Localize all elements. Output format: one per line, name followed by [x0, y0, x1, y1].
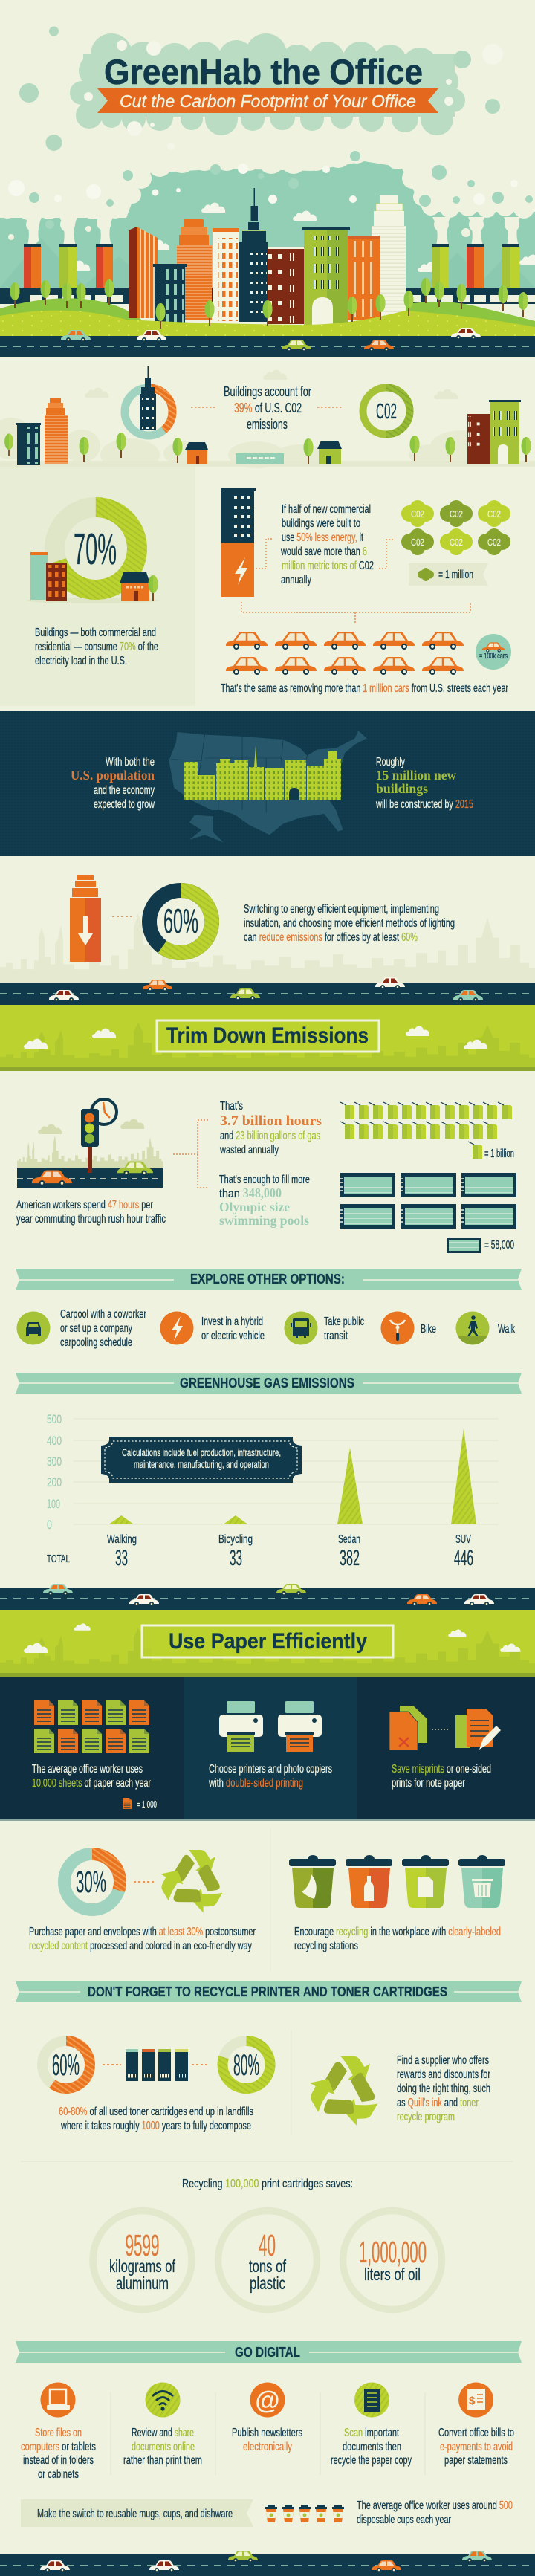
text: 3.7 billion hours	[219, 1100, 322, 1156]
small buildings and house	[30, 552, 158, 601]
recycle icon	[303, 2056, 387, 2129]
text: population growth: With both the	[106, 756, 155, 768]
legend: 1 billion: = 1 billion	[484, 1148, 514, 1160]
text: buildings consume 70%: residential — consume 70% of the	[35, 641, 158, 653]
text: swimming pools: than 348,000	[219, 1185, 282, 1200]
building: dark red	[268, 247, 304, 324]
intro text: Recycling 100,000 print cartridges saves:	[182, 2178, 353, 2190]
stat: plastic: 40	[259, 2228, 276, 2262]
green skyline	[0, 1023, 535, 1067]
text: 10,000 sheets: The average office worker uses	[32, 1763, 143, 1776]
text: scan	[331, 2427, 412, 2467]
callout	[101, 1437, 302, 1483]
orange tower with arrow	[70, 875, 101, 962]
sheets of paper grid	[34, 1700, 149, 1753]
right buildings	[467, 400, 521, 464]
CO2 cloud grid: C02	[450, 537, 463, 548]
legend: 100k cars	[476, 634, 511, 670]
legend: 58,000: = 58,000	[484, 1239, 514, 1252]
text: switching	[244, 903, 455, 944]
CO2 donut: C02	[376, 400, 397, 424]
text: buildings consume 70%	[35, 627, 158, 667]
banner: explore other options: EXPLORE OTHER OPTIONS:	[190, 1272, 345, 1287]
text: 3.7 billion hours: and 23 billion gallons of gas	[220, 1130, 320, 1142]
totals: 33	[115, 1546, 128, 1570]
category labels: Walking	[107, 1533, 137, 1546]
text: 47 hours: year commuting through rush hour traffic	[16, 1213, 166, 1226]
elevated bridge	[0, 288, 535, 304]
text: recycled content: Purchase paper and envelopes with at least 30% postconsumer	[29, 1926, 256, 1938]
panel: commuting traffic	[16, 1099, 516, 1253]
panel: half of new commercial buildings	[221, 488, 511, 695]
text: store files	[21, 2427, 96, 2481]
text: swimming pools: Olympic size	[219, 1200, 290, 1214]
dotted connector	[173, 1120, 208, 1188]
icon: bolt	[160, 1311, 193, 1345]
icon: bill: $	[469, 2395, 476, 2407]
panel: recycling saves	[21, 2161, 513, 2310]
option: transit text: Take public	[324, 1315, 364, 1328]
y axis labels: 300	[47, 1454, 62, 1469]
text: 15 million new buildings	[375, 756, 473, 811]
text: buildings account	[224, 384, 311, 432]
section: buildings account for 39%	[0, 366, 535, 471]
category labels: Bicycling	[218, 1533, 253, 1546]
text: 50% less energy: use 50% less energy, it	[282, 531, 363, 544]
y axis labels: 0	[47, 1518, 52, 1532]
legend: 1,000	[123, 1798, 157, 1810]
text: 50% less energy: would save more than 6	[280, 546, 367, 558]
text: store files: computers or tablets	[21, 2441, 96, 2453]
text: switching: Switching to energy efficient equipment, implementing	[244, 903, 439, 916]
text: scan: documents then	[343, 2441, 401, 2453]
y axis labels: 100	[47, 1497, 60, 1511]
text: find a supplier: rewards and discounts for	[397, 2068, 490, 2081]
text: 10,000 sheets: 10,000 sheets of paper each year	[32, 1777, 151, 1790]
option: carpool text: carpooling schedule	[60, 1336, 132, 1349]
donut 60%: 60%	[163, 902, 198, 940]
traffic light and clock	[81, 1099, 117, 1173]
icon: at sign	[250, 2383, 285, 2417]
icon: bike	[380, 1311, 415, 1345]
text: recycling stations: Encourage recycling in the workplace with clearly-labeled	[294, 1926, 501, 1938]
text: recycling stations	[294, 1926, 501, 1952]
CO2 cloud grid: C02	[487, 537, 501, 548]
polluted sky	[0, 161, 535, 297]
legend: 1 million: = 1 million	[438, 569, 473, 581]
text: 15 million new buildings: will be constructed by 2015	[375, 798, 473, 811]
road with cars	[0, 977, 535, 1005]
text: 50% less energy: annually	[281, 574, 311, 586]
building: cream	[213, 228, 239, 324]
text: misprints	[392, 1763, 491, 1790]
y axis labels	[47, 1412, 62, 1532]
text: misprints: Save misprints or one-sided	[392, 1763, 491, 1776]
banner: greenhouse gas emissions	[16, 1373, 522, 1394]
banner: explore other options	[16, 1269, 522, 1290]
donut 70%: 70%	[74, 525, 117, 574]
smog cloud behind title	[70, 33, 465, 135]
text: buildings account: Buildings account for	[224, 384, 311, 399]
icon: wifi	[146, 2383, 180, 2417]
heading: Trim Down Emissions	[166, 1023, 369, 1048]
text: 15 million new buildings: buildings	[376, 781, 428, 796]
panel: US map dark band	[0, 711, 535, 856]
building: navy spire	[239, 188, 268, 322]
legend: 1 billion	[468, 1142, 514, 1160]
text: 10,000 sheets	[32, 1763, 151, 1790]
text: landfills: 60-80% of all used toner cartridges end up in landfills	[59, 2106, 253, 2118]
text: newsletters	[232, 2427, 302, 2453]
option: hybrid text: Invest in a hybrid	[201, 1315, 263, 1328]
donut 80%: 80%	[233, 2049, 259, 2082]
text: 3.7 billion hours: That's	[220, 1100, 243, 1113]
recycling bins	[289, 1855, 505, 1908]
text: newsletters: Publish newsletters	[232, 2427, 302, 2439]
icon: at sign: @	[255, 2386, 280, 2415]
option: transit text: transit	[324, 1330, 348, 1342]
banner: toner cartridges: DON'T FORGET TO RECYCLE PRINTER AND TONER CARTRIDGES	[88, 1984, 447, 1999]
panel: reusable mugs	[21, 2499, 513, 2527]
text: population growth: and the economy	[94, 784, 155, 797]
text: store files: Store files on	[35, 2427, 82, 2439]
legend: 58,000	[447, 1238, 514, 1253]
text: e-payments: paper statements	[444, 2454, 508, 2467]
text: swimming pools	[219, 1174, 310, 1228]
car rows	[226, 632, 464, 675]
dotted connectors	[241, 539, 470, 623]
stat: aluminum: kilograms of	[109, 2256, 175, 2276]
back hills	[0, 298, 535, 336]
text: landfills	[59, 2106, 253, 2132]
ribbon banner	[97, 88, 438, 113]
stat: plastic: plastic	[250, 2274, 285, 2293]
grid lines	[74, 1419, 499, 1524]
banner: go digital: GO DIGITAL	[235, 2345, 300, 2360]
text: buildings account: 39% of U.S. C02	[234, 401, 302, 415]
option: carpool text: Carpool with a coworker	[60, 1308, 146, 1321]
stat: plastic: tons of	[249, 2256, 286, 2276]
building with lightning bolt	[221, 488, 256, 597]
options row	[16, 1308, 516, 1349]
US map	[169, 731, 367, 842]
subtitle: Cut the Carbon Footprint of Your Office	[120, 91, 416, 111]
chart: greenhouse gas emissions	[47, 1412, 499, 1570]
icon: document	[354, 2383, 389, 2417]
totals	[47, 1546, 473, 1570]
y axis labels: 400	[47, 1434, 62, 1448]
text: double-sided	[208, 1763, 332, 1790]
skyscraper donut 39%	[125, 366, 172, 436]
legend: 1,000: = 1,000	[137, 1799, 157, 1810]
stat: oil	[343, 2210, 441, 2310]
stat: aluminum: 9599	[125, 2228, 159, 2262]
text: find a supplier	[397, 2054, 490, 2123]
donut 60%	[149, 890, 212, 953]
panel: paper tips dark band	[0, 1677, 535, 1821]
faint mountains	[0, 238, 535, 288]
legend: 1 million	[409, 563, 488, 586]
text: buildings consume 70%: electricity load in the U.S.	[35, 655, 127, 667]
ribbon text: Make the switch to reusable mugs, cups, and dishware	[37, 2508, 233, 2520]
header: title cloud	[19, 27, 503, 151]
text: 500 cups: disposable cups each year	[357, 2514, 451, 2526]
header: skyline scene	[0, 139, 535, 357]
houses	[185, 441, 342, 464]
foreground ground	[0, 311, 535, 336]
legend: 100k cars: = 100k cars	[479, 652, 508, 661]
text: 3.7 billion hours: wasted annually	[219, 1144, 279, 1156]
dotted connectors	[103, 2064, 210, 2065]
option: hybrid text	[201, 1315, 265, 1342]
dotted connectors	[191, 407, 343, 408]
text: e-payments	[438, 2427, 514, 2467]
small trees	[4, 433, 531, 464]
text: find a supplier: as Quill's ink and toner	[397, 2097, 479, 2109]
totals: 382	[340, 1546, 360, 1570]
text: population growth	[71, 756, 155, 811]
banner: toner cartridges	[16, 1981, 522, 2002]
printers	[219, 1701, 322, 1752]
text: 3.7 billion hours: 3.7 billion hours	[220, 1113, 322, 1129]
building: orange stepped	[177, 219, 212, 320]
text: swimming pools: That's enough to fill more	[219, 1174, 310, 1186]
skyline and road	[17, 1119, 163, 1188]
text: store files: or cabinets	[38, 2468, 79, 2481]
text: share documents: Review and share	[132, 2427, 194, 2439]
text: scan: Scan important	[344, 2427, 399, 2439]
recycle icon	[155, 1850, 231, 1916]
cartridges	[126, 2049, 188, 2081]
banner: greenhouse gas emissions: GREENHOUSE GAS EMISSIONS	[180, 1376, 354, 1391]
CO2 cloud grid: C02	[487, 508, 501, 520]
icon: bill	[458, 2383, 493, 2417]
panel: go digital columns	[21, 2383, 514, 2481]
icon: laptop	[40, 2383, 76, 2417]
main title: GreenHab the Office	[104, 52, 423, 91]
donut 70%	[26, 507, 160, 603]
text: recycled content	[29, 1926, 256, 1952]
text: scan: recycle the paper copy	[331, 2454, 412, 2467]
text: 500 cups	[357, 2499, 513, 2526]
trees	[10, 278, 528, 329]
text: swimming pools: swimming pools	[219, 1213, 309, 1228]
option: carpool text: or set up a company	[60, 1322, 132, 1335]
totals: TOTAL	[47, 1553, 70, 1565]
category labels: SUV	[455, 1533, 471, 1546]
callout: maintenance, manufacturing, and operation	[134, 1459, 269, 1470]
dotted connector	[112, 916, 133, 917]
text: 50% less energy	[280, 503, 374, 586]
text: population growth: expected to grow	[94, 798, 155, 811]
donut 30%	[64, 1854, 120, 1910]
text: double-sided: with double-sided printing	[208, 1777, 303, 1790]
building: slanted orange	[129, 227, 158, 318]
section header: use paper efficiently	[0, 1610, 535, 1677]
CO2 cloud grid: C02	[450, 508, 463, 520]
text: newsletters: electronically	[243, 2441, 292, 2453]
text: buildings consume 70%: Buildings — both commercial and	[35, 627, 156, 639]
text: 47 hours	[16, 1199, 166, 1226]
stat: plastic	[218, 2210, 317, 2310]
text: find a supplier: recycle program	[397, 2111, 455, 2123]
faint skyline	[0, 914, 535, 983]
heading box	[142, 1625, 393, 1657]
text: landfills: where it takes roughly 1000 years to fully decompose	[60, 2120, 251, 2132]
text: store files: instead of in folders	[23, 2454, 94, 2467]
building: navy with teal windows	[153, 264, 187, 324]
category labels: Sedan	[338, 1533, 360, 1546]
option: hybrid text: or electric vehicle	[201, 1330, 265, 1342]
icon: walker	[456, 1311, 489, 1345]
column dividers	[111, 2392, 425, 2475]
text: misprints: prints for note paper	[392, 1777, 465, 1790]
CO2 cloud grid: C02	[411, 537, 424, 548]
stat: aluminum	[93, 2210, 192, 2310]
text: 50% less energy: million metric tons of C02	[282, 560, 374, 572]
CO2 cloud grid	[401, 500, 510, 555]
text: share documents	[123, 2427, 202, 2467]
totals: 33	[230, 1546, 242, 1570]
option: transit text	[324, 1315, 364, 1342]
text: recycled content: recycled content processed and colored in an eco-friendly way	[29, 1940, 252, 1952]
banner: go digital	[16, 2341, 522, 2363]
y axis labels: 200	[47, 1475, 62, 1489]
ribbon	[21, 2499, 253, 2527]
text: find a supplier: Find a supplier who offers	[397, 2054, 489, 2067]
donut 60%	[42, 2041, 90, 2088]
icon: car	[16, 1311, 51, 1345]
text: find a supplier: doing the right thing, such	[397, 2083, 490, 2095]
pools	[340, 1173, 516, 1229]
small clouds	[66, 203, 535, 272]
green city on map	[184, 745, 341, 800]
section: reduce emissions 60%	[0, 875, 535, 1005]
option: carpool text	[60, 1308, 146, 1349]
stat: oil: liters of oil	[364, 2265, 421, 2284]
building: cream tower	[372, 195, 406, 314]
text: double-sided: Choose printers and photo copiers	[209, 1763, 332, 1776]
clouds	[24, 1026, 487, 1049]
stat: aluminum: aluminum	[116, 2274, 169, 2293]
road with cars	[0, 328, 535, 357]
panel: recycled paper	[29, 1828, 505, 1971]
text: switching: can reduce emissions for offices by at least 60%	[244, 931, 418, 944]
CO2 donut	[363, 388, 410, 434]
option: walk text: Walk	[498, 1323, 516, 1336]
misprint documents	[389, 1706, 501, 1750]
stat: oil: 1,000,000	[359, 2235, 427, 2269]
faint background hills and clouds	[0, 418, 535, 471]
text: 50% less energy: buildings were built to	[282, 517, 360, 530]
donut 60%: 60%	[52, 2049, 80, 2082]
heading box	[157, 1020, 379, 1052]
section header: trim down emissions	[0, 1005, 535, 1071]
text: population growth: U.S. population	[71, 768, 155, 783]
icon: bus	[284, 1311, 318, 1345]
road with cars	[0, 1584, 535, 1610]
cups	[265, 2505, 344, 2522]
building: orange right	[348, 236, 380, 320]
totals: 446	[454, 1546, 473, 1570]
text: share documents: documents online	[132, 2441, 195, 2453]
CO2 cloud grid: C02	[411, 508, 424, 520]
category labels	[107, 1533, 471, 1546]
smoke stacks	[24, 244, 519, 288]
text: 15 million new buildings: 15 million new	[376, 768, 456, 783]
text: buildings account: emissions	[247, 417, 288, 432]
callout: Calculations include fuel production, infrastructure,	[122, 1447, 281, 1458]
text: 50% less energy: If half of new commercial	[282, 503, 371, 516]
text: share documents: rather than print them	[123, 2454, 202, 2467]
panel: toner cartridges	[42, 2030, 490, 2135]
bars	[108, 1428, 476, 1524]
gas cans	[340, 1102, 512, 1139]
panel: 70 percent electricity	[0, 467, 195, 706]
text: recycling stations: recycling stations	[294, 1940, 358, 1952]
y axis labels: 500	[47, 1412, 62, 1426]
left buildings	[16, 398, 68, 465]
donut 80%	[223, 2041, 270, 2088]
green skyline	[0, 1628, 535, 1673]
text: 15 million new buildings: Roughly	[376, 756, 405, 768]
donut 30%: 30%	[76, 1865, 106, 1899]
footer road with cars	[0, 2551, 535, 2576]
clouds	[24, 1623, 520, 1653]
text: 47 hours: American workers spend 47 hours per	[16, 1199, 153, 1211]
heading: Use Paper Efficiently	[169, 1629, 367, 1654]
cars	[32, 1162, 153, 1186]
dotted connector	[134, 1881, 154, 1883]
option: bike text: Bike	[421, 1323, 436, 1336]
building: green arch	[302, 227, 350, 325]
